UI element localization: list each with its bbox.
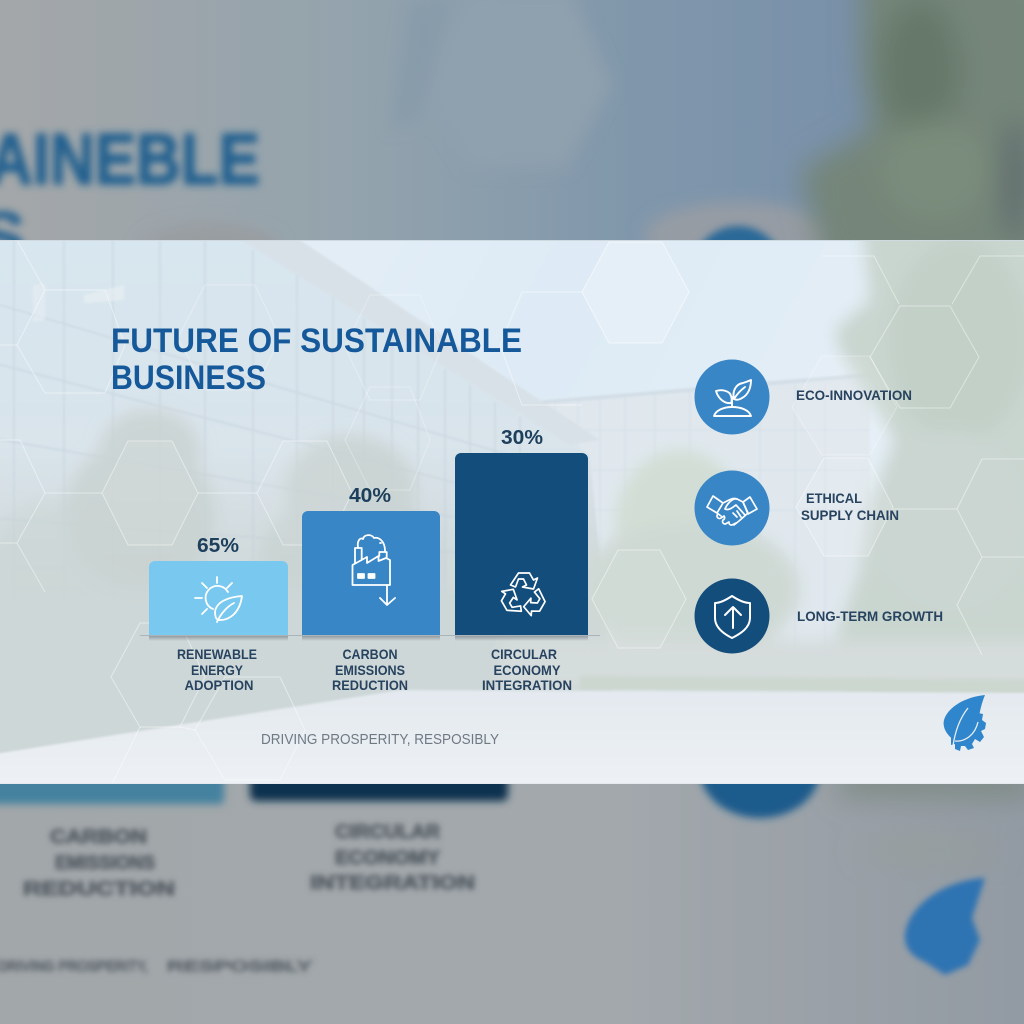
label: ENERGY (191, 662, 244, 678)
icon: handshake (707, 496, 757, 525)
pillar: ethical supply chain: SUPPLY CHAIN (801, 507, 899, 523)
label: ECONOMY (494, 662, 561, 678)
bar: circular economy integration: 30% (501, 427, 543, 449)
central panel: washed-out campus photo (0, 240, 1024, 784)
blurred title fragment (0, 127, 778, 240)
blurred background band: bottom (0, 784, 1024, 1024)
near glass facade (0, 241, 598, 594)
bar: carbon emissions reduction (302, 485, 440, 693)
icon: shield with arrow (715, 596, 750, 638)
label: INTEGRATION (482, 677, 572, 693)
blurred background band: top (0, 0, 1024, 240)
blurred labels and logo (0, 822, 985, 975)
blurred labels and logo: CARBON (50, 827, 147, 848)
pillar: ethical supply chain (694, 470, 899, 546)
icon: recycling arrows (497, 573, 549, 618)
label: REDUCTION (332, 677, 408, 693)
pillar: eco-innovation: ECO-INNOVATION (796, 387, 912, 403)
icon: sun and leaf (195, 577, 242, 622)
label: CARBON (342, 646, 398, 662)
blurred labels and logo: INTEGRATION (310, 873, 475, 894)
blurred labels and logo: CIRCULAR (335, 822, 440, 843)
blurred labels and logo: REDUCTION (23, 879, 175, 900)
blurred labels and logo: ECONOMY (335, 848, 440, 869)
pillar: eco-innovation (694, 360, 912, 434)
far building (543, 376, 869, 632)
title (111, 322, 522, 397)
pillar: ethical supply chain: ETHICAL (806, 490, 862, 506)
label (177, 646, 257, 693)
courtyard strip and pavement (0, 677, 1024, 783)
label (482, 646, 572, 693)
icon: sprout (714, 380, 751, 416)
label: ADOPTION (184, 677, 254, 693)
bar: renewable energy adoption (149, 535, 288, 693)
label (332, 646, 408, 693)
icon: factory with down arrow (352, 535, 395, 605)
label: CIRCULAR (491, 646, 557, 662)
title: FUTURE OF SUSTAINABLE (111, 322, 522, 360)
bar: circular economy integration (455, 427, 588, 693)
blurred labels and logo: DRIVING PROSPERITY, (0, 958, 148, 975)
hexagon network (0, 240, 1024, 784)
tagline: DRIVING PROSPERITY, RESPOSIBLY (261, 732, 499, 748)
label: EMISSIONS (335, 662, 405, 678)
bar chart (140, 427, 600, 693)
blurred labels and logo: EMISSIONS (55, 853, 155, 874)
baseline (140, 635, 600, 641)
label: RENEWABLE (177, 646, 257, 662)
trees (54, 241, 1024, 685)
bar: carbon emissions reduction: 40% (349, 485, 391, 507)
logo: leaf and gear (944, 695, 986, 751)
pillar: long-term growth: LONG-TERM GROWTH (797, 608, 943, 624)
pillar: long-term growth (694, 578, 943, 654)
bar: renewable energy adoption: 65% (197, 535, 239, 557)
blurred labels and logo: RESPOSIBLY (167, 958, 312, 975)
panel edge highlights (0, 240, 1024, 241)
title: BUSINESS (111, 359, 266, 397)
